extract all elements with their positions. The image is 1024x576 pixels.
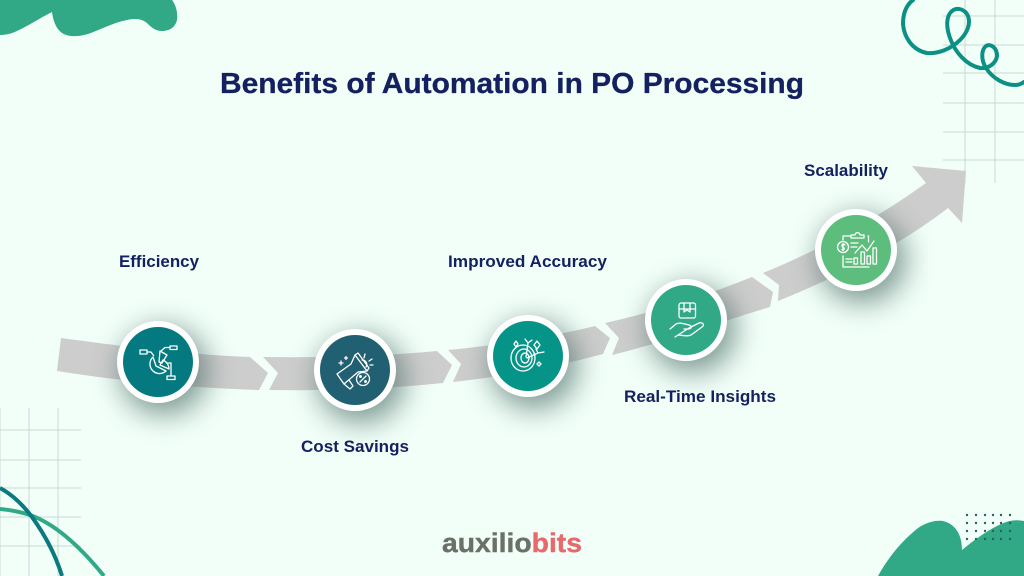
- icon: clipboard with charts: [838, 233, 876, 267]
- growth arrow: [57, 166, 966, 390]
- step 5: scalability: [815, 209, 897, 291]
- arrow segment 4: [605, 277, 773, 355]
- icon: megaphone with percent: [337, 353, 373, 389]
- logo: auxiliobits: [442, 528, 582, 558]
- arrow segment 5 with head: [763, 166, 966, 301]
- circle shadows: [120, 215, 906, 423]
- label: efficiency: Efficiency: [119, 252, 200, 271]
- icon: hand holding box: [670, 303, 703, 337]
- decorative grid: top right: [943, 0, 1024, 183]
- decorative grid: bottom left: [0, 408, 81, 576]
- step 1: efficiency: [117, 321, 199, 403]
- step 2: cost savings: [314, 329, 396, 411]
- decorative squiggle: top right: [903, 0, 1024, 85]
- icon: target with darts: [511, 339, 544, 371]
- icon: pie chart with tags: [140, 346, 177, 380]
- label: real-time insights: Real-Time Insights: [624, 387, 776, 406]
- step 4: real-time insights: [645, 279, 727, 361]
- decorative blob: top left: [0, 0, 177, 36]
- label: cost savings: Cost Savings: [301, 437, 409, 456]
- label: scalability: Scalability: [804, 161, 889, 180]
- decorative arcs: bottom left: [0, 488, 104, 576]
- arrow segment 3: [448, 326, 610, 382]
- label: improved accuracy: Improved Accuracy: [448, 252, 608, 271]
- decorative dot grid: bottom right: [966, 514, 1011, 540]
- arrow segment 1: [57, 338, 268, 390]
- step 3: improved accuracy: [487, 315, 569, 397]
- title: Benefits of Automation in PO Processing: [220, 68, 804, 100]
- arrow segment 2: [263, 351, 452, 390]
- decorative blob: bottom right: [878, 520, 1024, 576]
